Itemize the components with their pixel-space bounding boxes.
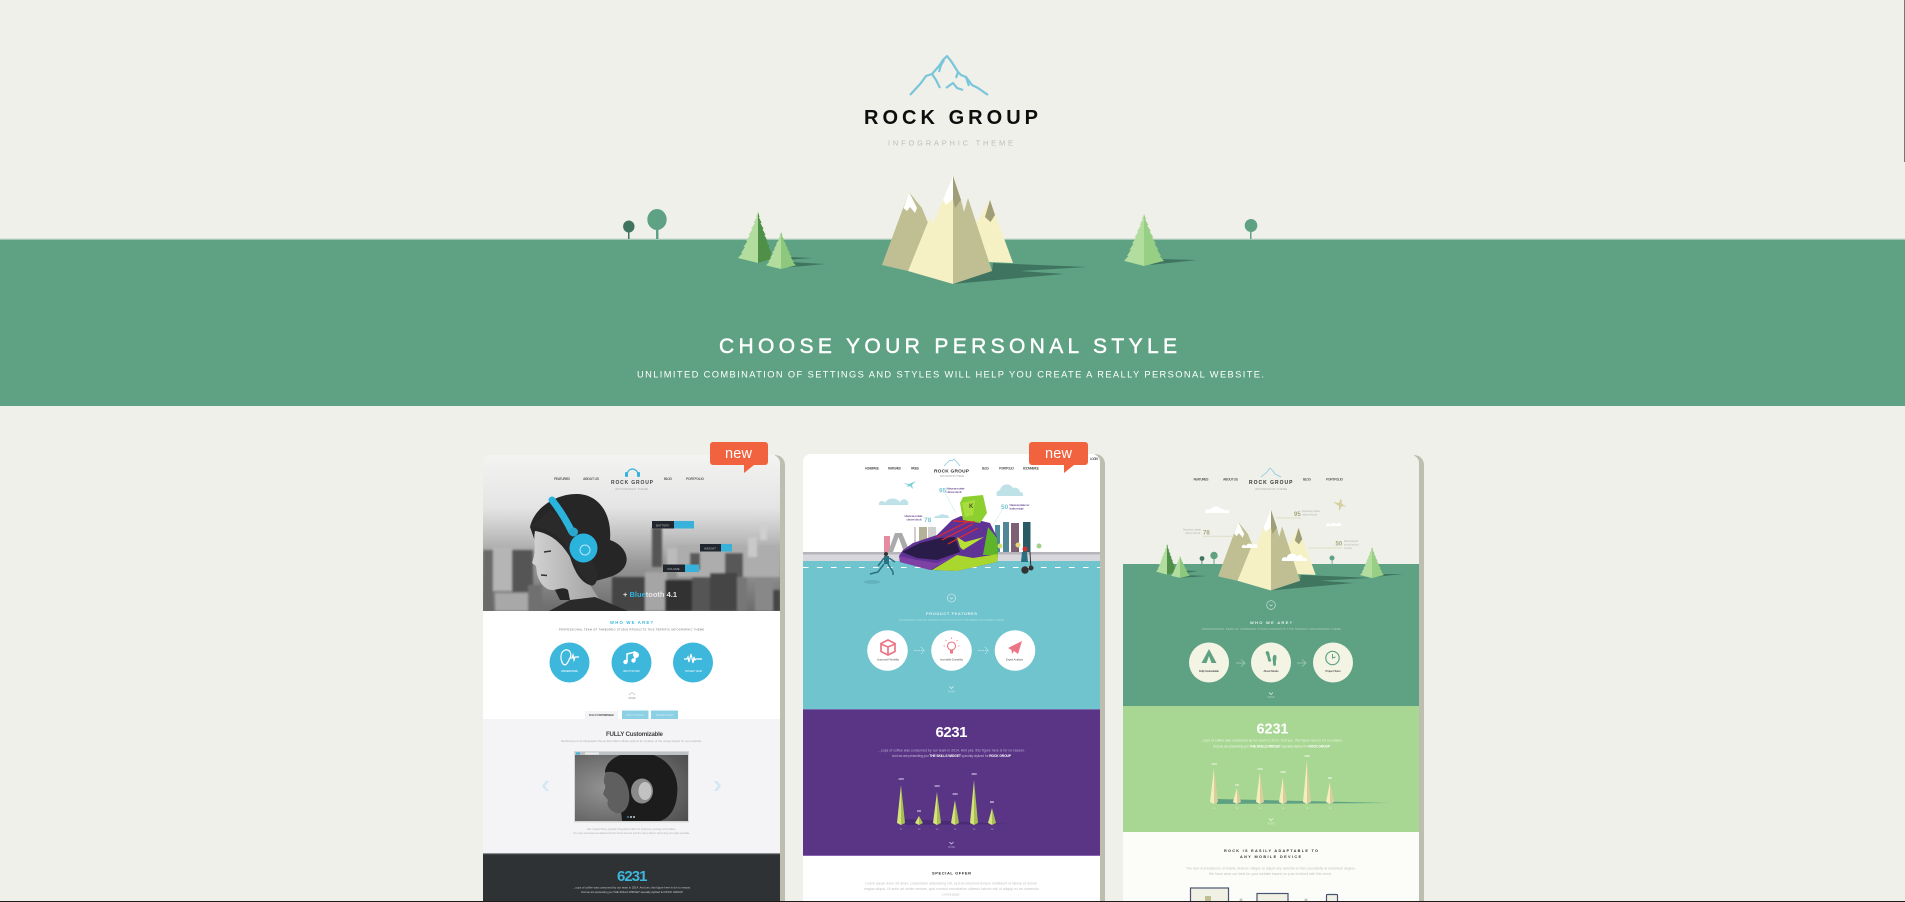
stat caption [1200, 738, 1343, 748]
feature circle: durability [931, 630, 972, 671]
round tree right [1245, 219, 1257, 239]
icon circle: responsive [550, 642, 590, 682]
theme card 1: headphones [483, 455, 785, 902]
dotted arrow 2 [978, 647, 988, 654]
header subtitle: INFOGRAPHIC THEME [888, 138, 1013, 148]
stat caption [573, 886, 691, 894]
callout 50: Maecenas porta [1344, 539, 1359, 543]
site logo and navigation: INFOGRAPHIC THEME [940, 475, 964, 478]
callout 95: ultricies blandit [946, 490, 962, 494]
segway rider figure [1021, 546, 1034, 574]
mobile heading: ANY MOBILE DEVICE [1240, 855, 1301, 859]
arrow 1 [1236, 660, 1245, 666]
spec tag: weight [700, 544, 732, 552]
spike chart: Y5 [973, 829, 976, 831]
feature circle: tent [1189, 642, 1229, 682]
stat caption [878, 748, 1025, 758]
callout 78: ultricies blandit [1185, 531, 1200, 535]
site logo and navigation: BLOG [664, 477, 672, 481]
spike chart: 890 [1328, 777, 1333, 780]
callout 50 [992, 503, 1030, 527]
feature circle: flexibility [867, 630, 908, 671]
site logo and navigation [865, 457, 1099, 478]
plane [903, 481, 916, 489]
spike chart: Y4 [1282, 808, 1285, 810]
spike chart: 456 [917, 810, 922, 813]
central paper mountains [882, 176, 1087, 284]
callout 78: 78 [1203, 530, 1210, 536]
round tree large [647, 209, 667, 239]
spike chart: Y2 [918, 829, 921, 831]
paper mountains [1218, 510, 1371, 590]
more link [628, 692, 636, 699]
spike chart: 1478 [898, 778, 904, 781]
slider section [483, 719, 780, 853]
spike chart: 1240 [934, 785, 940, 788]
white intro section [483, 611, 780, 719]
stat caption: ...cups of coffee was consumed by our team in 2014. And yes, this figure here is for no reason. [1200, 738, 1343, 742]
tabs: PROJECT TEAM [656, 713, 673, 717]
site logo and navigation: PAGES [911, 466, 920, 470]
callout 95 [939, 486, 965, 513]
callout 95: ultricies blandit [1302, 512, 1317, 516]
spike chart: 1240 [1257, 768, 1263, 771]
feature circle: flexibility: Improved Flexibility [877, 658, 900, 662]
spike chart: 1650 [1304, 755, 1310, 758]
green ground section [1123, 564, 1419, 706]
spike chart: Y6 [991, 829, 994, 831]
callout 78 [904, 514, 938, 535]
tabs [585, 710, 678, 719]
site logo and navigation: ROCK GROUP [1249, 480, 1293, 486]
callout 50 [1308, 539, 1360, 550]
section subheading: UNLIMITED COMBINATION OF SETTINGS AND STYLES WILL HELP YOU CREATE A REALLY PERSONAL WEBSITE. [637, 370, 1264, 380]
site logo and navigation: PORTFOLIO [1326, 478, 1343, 482]
stat caption: And we are presenting you THE SKILLS WIDGET specially stylized for ROCK GROUP [892, 754, 1012, 758]
section heading: CHOOSE YOUR PERSONAL STYLE [719, 335, 1177, 358]
device: monitor [1190, 888, 1228, 902]
window scrollbar sliver [1904, 0, 1905, 162]
icon circle: music: ABOUT STUDIO [623, 669, 640, 673]
road dashes [803, 567, 1100, 568]
new badge card 2: new [1045, 446, 1073, 462]
pine trees [1156, 544, 1403, 578]
special offer text [864, 882, 1039, 896]
slider caption [573, 828, 690, 834]
spike chart [897, 773, 1010, 831]
mobile text: We have done our best for your website based on p.ad to blend with this trend. [1209, 872, 1332, 876]
slider arrow right [714, 781, 721, 791]
spike chart: Y2 [1236, 808, 1239, 810]
callout 95: Maecenas molestie [1302, 509, 1321, 513]
section marker icon [948, 594, 956, 602]
special offer text: magna aliqua. Ut enim ad minim veniam, quis nostrud exercitation ullamco laboris nisi ut aliquip ex ea commodo [864, 887, 1039, 891]
right pine tree with shadow [1124, 214, 1197, 266]
round trees [1200, 552, 1334, 564]
site logo and navigation: BLOG [982, 466, 989, 470]
stat caption: And we are presenting you THE SKILLS WIDGET specially stylized for ROCK GROUP [581, 890, 683, 894]
skyline buildings [884, 522, 1042, 552]
chevron more: MORE [948, 690, 955, 694]
spike chart [1210, 755, 1390, 810]
site logo and navigation [554, 469, 704, 491]
light green stats section [1123, 706, 1419, 832]
sneaker [899, 495, 998, 571]
slider browser mockup photo [574, 751, 689, 822]
callout 95: Maecenas molestie [946, 486, 965, 490]
device arrows [1240, 898, 1308, 902]
slider subtext: RockGroup is an infographic theme that offers infinite options for creation of the unique layout for your website. [561, 739, 702, 743]
site logo and navigation: ABOUT US [1223, 478, 1239, 482]
site logo and navigation: PORTFOLIO [686, 477, 704, 481]
feature circle: clock [1313, 642, 1353, 682]
stat caption: ...cups of coffee was consumed by our team in 2014. And yes, this figure here is for no reason. [573, 886, 691, 890]
theme card 3: mountains [1123, 455, 1424, 902]
site logo and navigation: INFOGRAPHIC THEME [1255, 487, 1287, 491]
special offer text: Lorem ipsum dolor sit amet, consectetur adipisicing elit, sed do eiusmod tempor incididunt ut labore et dolore [865, 882, 1037, 886]
dark stats section [483, 853, 780, 902]
callout 78: 78 [924, 517, 932, 524]
spec tag: battery [652, 521, 694, 528]
green ground band [0, 238, 1905, 406]
sneaker: K [969, 504, 974, 510]
device: tablet [1257, 894, 1288, 902]
header logo: mountain outline [910, 56, 988, 95]
round tree dark [623, 220, 634, 239]
chevron more [1268, 818, 1275, 826]
spike chart: 1060 [1280, 771, 1286, 774]
spike chart: 1060 [952, 793, 958, 796]
device: phone [1326, 894, 1338, 902]
clouds [879, 484, 1023, 518]
spec tag: volume [663, 564, 699, 572]
callout 50: 50 [1001, 504, 1009, 511]
site logo and navigation: HOMEPAGE [865, 466, 880, 470]
stat number: 6231 [936, 724, 968, 741]
teal feature section [803, 561, 1100, 709]
spike chart: Y3 [936, 829, 939, 831]
site logo and navigation: ROCK GROUP [934, 468, 970, 474]
feature subtext: PROFESSIONAL TEAM OF TAMBORDO STUDIO PRODUCTS THIS TERRIFIC INFOGRAPHIC THEME [899, 619, 1004, 622]
callout 95: 95 [1294, 512, 1301, 518]
callout 78 [1183, 528, 1234, 537]
spike chart: Y3 [1259, 808, 1262, 810]
slider caption: You may use those templates both for these themes and for many others, since they are quite versatile. [573, 831, 690, 835]
site logo and navigation: LOGIN [1090, 457, 1099, 461]
new badge card 1: new [725, 446, 753, 462]
new badge card 2 [1029, 442, 1088, 473]
spike chart: Y4 [954, 829, 957, 831]
special offer text: consequat. [942, 892, 960, 896]
callout 50: suscipit [1344, 546, 1352, 550]
chevron more: MORE [1268, 822, 1275, 826]
intro heading: WHO WE ARE? [610, 620, 653, 625]
feature circle: clock: Project Team [1326, 669, 1341, 673]
feature circle: durability: Incredible Durability [940, 658, 964, 662]
spike chart: 890 [990, 801, 995, 804]
spike chart: 1478 [1211, 763, 1217, 766]
section marker icon [1267, 601, 1275, 609]
feature circle: footprints: About Studio [1264, 669, 1279, 673]
special offer heading: SPECIAL OFFER [932, 870, 971, 876]
site logo and navigation: FEATURES [888, 466, 902, 470]
icon circle: sound wave: PROJECT TEAM [685, 669, 702, 673]
callout 50: leo nec faucibus [1344, 542, 1360, 546]
hero caption: + Bluetooth 4.1 [623, 590, 677, 599]
feature heading: PRODUCT FEATURES [926, 611, 977, 616]
tabs: FULLY CUSTOMIZABLE [589, 713, 614, 717]
mobile text: The fact of prevalence of mobile devices obliges to adjust any website to their peculiarity at maximum degree. [1186, 866, 1356, 870]
icon circle: responsive: 100% RESPONSIVE [561, 669, 578, 673]
spec tag: weight: WEIGHT [704, 546, 716, 550]
slider arrow left [542, 781, 549, 791]
spike chart: 1650 [971, 773, 977, 776]
site logo and navigation: ROCK GROUP [611, 480, 654, 486]
callout 50: faucibus suscipit [1010, 506, 1024, 510]
stat caption: And we are presenting you THE SKILLS WIDGET specially stylized for ROCK GROUP [1213, 744, 1331, 748]
chevron more: MORE [948, 846, 955, 849]
site logo and navigation: PORTFOLIO [999, 466, 1014, 470]
chevron more: MORE [1268, 696, 1275, 699]
chevron more [1268, 692, 1275, 699]
special offer section [803, 856, 1100, 902]
stat number: 6231 [1256, 722, 1288, 738]
spike chart: Y6 [1329, 808, 1332, 810]
site logo and navigation: FEATURED [554, 477, 571, 481]
feature circle: tent: Fully Customizable [1199, 669, 1220, 673]
site logo and navigation: FEATURES [1194, 478, 1209, 482]
spike chart: 456 [1235, 784, 1240, 787]
pine tree pair with shadows [738, 212, 825, 269]
theme card 2: sneaker [803, 454, 1105, 902]
spec tag: battery: BATTERY [656, 523, 670, 527]
callout 78: ultricies blandit [906, 518, 922, 522]
site logo and navigation: ECOMMERCE [1023, 466, 1040, 470]
slider heading: FULLY Customizable [606, 731, 664, 738]
tabs: ABOUT STUDIO [626, 713, 644, 717]
intro subtext: PROFESSIONAL TEAM OF TAMBORDO STUDIO PRODUCTS THIS TERRIFIC INFOGRAPHIC THEME [559, 628, 704, 632]
plane [1333, 498, 1347, 511]
icon circle: music [612, 642, 652, 682]
icon circle: sound wave [673, 642, 713, 682]
header title: ROCK GROUP [864, 107, 1038, 129]
callout 50: Maecenas porta leo nec [1010, 503, 1030, 507]
arrow 2 [1297, 660, 1306, 666]
site logo and navigation: BLOG [1303, 478, 1311, 482]
more link: MORE [628, 697, 636, 700]
site logo and navigation [1194, 468, 1343, 491]
dotted arrow 1 [914, 647, 924, 654]
feature circle: analysis [995, 630, 1035, 671]
mobile text [1186, 866, 1356, 876]
callout 95 [1276, 509, 1321, 518]
site logo and navigation: INFOGRAPHIC THEME [615, 487, 648, 491]
callout 50: 50 [1336, 542, 1343, 548]
stat number: 6231 [617, 868, 648, 885]
road [803, 552, 1100, 562]
callout 95: 95 [939, 488, 947, 494]
chevron more [948, 842, 955, 849]
mobile section [1123, 832, 1419, 902]
spike chart: Y1 [900, 829, 903, 831]
hero photo: city and woman [483, 455, 780, 611]
mobile heading: ROCK IS EASILY ADAPTABLE TO [1224, 849, 1318, 853]
stat caption: ...cups of coffee was consumed by our team in 2014. And yes, this figure here is for no reason. [878, 748, 1025, 752]
mobile heading [1224, 849, 1318, 859]
clouds [1205, 506, 1341, 561]
feature circle: footprints [1251, 642, 1291, 682]
callout 78: Maecenas molestie [904, 514, 923, 518]
callout 78: Maecenas molestie [1183, 528, 1202, 532]
spike chart: Y1 [1213, 808, 1216, 810]
spec tag: volume: VOLUME [667, 567, 680, 571]
window bottom edge [0, 901, 1905, 902]
runner figure [864, 552, 895, 584]
slider caption: We created three popular infographic skins for business, ecology and politics. [587, 827, 676, 831]
chevron more [948, 686, 955, 694]
spike chart: Y5 [1306, 808, 1309, 810]
purple stats section [803, 709, 1100, 856]
who we are subtext: PROFESSIONAL TEAM OF TAMBORDO STUDIO PRODUCTS THIS TERRIFIC INFOGRAPHIC THEME [1202, 628, 1341, 631]
new badge card 1 [710, 442, 768, 473]
feature circle: analysis: Expert Analysis [1006, 658, 1024, 662]
site logo and navigation: ABOUT US [583, 477, 600, 481]
who we are heading: WHO WE ARE? [1250, 620, 1293, 625]
